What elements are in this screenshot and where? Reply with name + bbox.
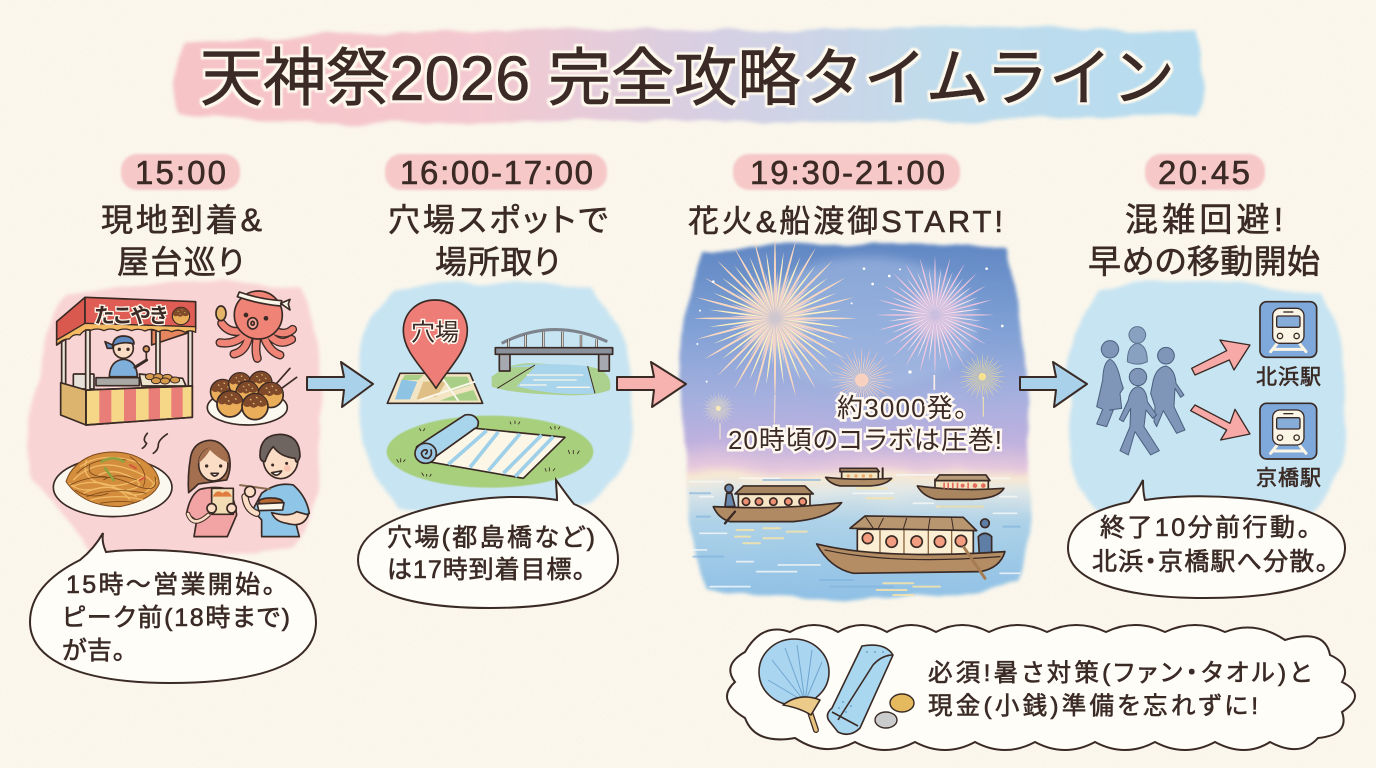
icon: Kyobashi station [1260, 403, 1317, 459]
icon: woman eating [187, 440, 237, 537]
cloud callout: heat and cash reminder [727, 625, 1355, 750]
icon: large foreground boat [817, 516, 1005, 578]
icon: map with pin: 穴場 [411, 319, 459, 346]
step 1 heading: 現地到着& [101, 202, 262, 238]
arrow: to Kitahama [1192, 340, 1250, 375]
step 1 heading [101, 202, 262, 280]
label: Kyobashi station: 京橋駅 [1256, 467, 1321, 490]
icon: takoyaki stall [57, 297, 196, 425]
arrow: to Kyobashi [1191, 405, 1250, 440]
icon: steam [142, 433, 167, 453]
firework: large pink burst [854, 234, 1016, 396]
step 2 heading: 場所取り [435, 244, 560, 280]
step 2 heading: 穴場スポットで [388, 202, 608, 238]
arrow: step 3 to step 4 [1020, 362, 1087, 407]
callout text [928, 659, 1311, 720]
icon: left boat [713, 484, 842, 523]
water ripples [690, 475, 1020, 595]
fireworks caption: 20時頃のコラボは圧巻! [728, 425, 1002, 455]
icon: man eating [239, 434, 309, 537]
speech bubble: spot tip [358, 480, 618, 608]
firework: small yellow burst [950, 344, 1015, 417]
step 2 time label: 16:00-17:00: 16:00-17:00 [400, 154, 593, 191]
icon: distant boat [826, 468, 892, 486]
firework: tiny cream burst [696, 386, 741, 439]
step 1 time label: 15:00: 15:00 [135, 154, 226, 191]
label: Kitahama station: 北浜駅 [1256, 366, 1321, 389]
step 4 heading: 早めの移動開始 [1088, 243, 1320, 280]
illustrations: food stalls [53, 291, 309, 537]
icon: octopus mascot [216, 291, 293, 358]
fireworks caption [728, 393, 1002, 455]
icon: crowd silhouettes [1097, 327, 1185, 455]
callout text: 必須!暑さ対策(ファン・タオル)と [928, 659, 1311, 687]
icon: map with pin [387, 300, 483, 403]
icon: river bridge [492, 330, 613, 395]
speech bubble: spot tip: 穴場(都島橋など) [387, 524, 595, 552]
callout text: 現金(小銭)準備を忘れずに! [928, 692, 1258, 720]
panel: spot watercolor [360, 282, 633, 512]
step 3 time label: 19:30-21:00: 19:30-21:00 [750, 154, 945, 191]
step 3 heading: 花火&船渡御START! [688, 204, 1003, 239]
illustrations: food stalls: たこやき [94, 305, 169, 328]
speech bubble: leave early tip [1068, 480, 1345, 598]
step 4 heading [1088, 201, 1320, 280]
icon: Kitahama station [1260, 302, 1317, 357]
stars [696, 267, 1004, 383]
firework: small peach burst [816, 334, 907, 426]
speech bubble: stalls tip: 15時〜営業開始。 [66, 571, 275, 599]
speech bubble: leave early tip: 終了10分前行動。 [1100, 514, 1310, 542]
icon: uchiwa fan [759, 639, 829, 730]
arrow: step 2 to step 3 [617, 362, 686, 407]
icon: folded towel [827, 645, 893, 734]
icon: takoyaki plate [207, 368, 297, 425]
icon: right boat [917, 475, 1004, 499]
illustrations: spot [387, 300, 613, 488]
fireworks caption: 約3000発。 [837, 393, 967, 423]
step 1 heading: 屋台巡り [117, 244, 244, 280]
speech bubble: leave early tip: 北浜・京橋駅へ分散。 [1092, 548, 1328, 576]
firework: large gold burst [663, 207, 887, 430]
panel: dispersal watercolor [1066, 282, 1345, 523]
speech bubble: spot tip: は17時到着目標。 [387, 556, 585, 584]
speech bubble: stalls tip: ピーク前(18時まで) [62, 604, 290, 632]
step 4 heading: 混雑回避! [1125, 201, 1283, 238]
arrow: step 1 to step 2 [307, 362, 373, 407]
step 4 time label: 20:45: 20:45 [1158, 154, 1250, 191]
icon: picnic mat on grass [387, 415, 593, 488]
icon: vendor [105, 336, 149, 377]
icon: yakisoba plate [53, 452, 172, 517]
icon: coins [875, 694, 914, 728]
speech bubble: stalls tip: が吉。 [62, 637, 125, 665]
step 2 heading [388, 202, 608, 280]
title: 天神祭2026 完全攻略タイムライン [200, 44, 1175, 114]
panel: fireworks and boats scene [663, 207, 1029, 599]
panel: food stalls watercolor [29, 283, 321, 558]
title banner [174, 27, 1202, 123]
speech bubble: stalls tip [30, 533, 316, 683]
